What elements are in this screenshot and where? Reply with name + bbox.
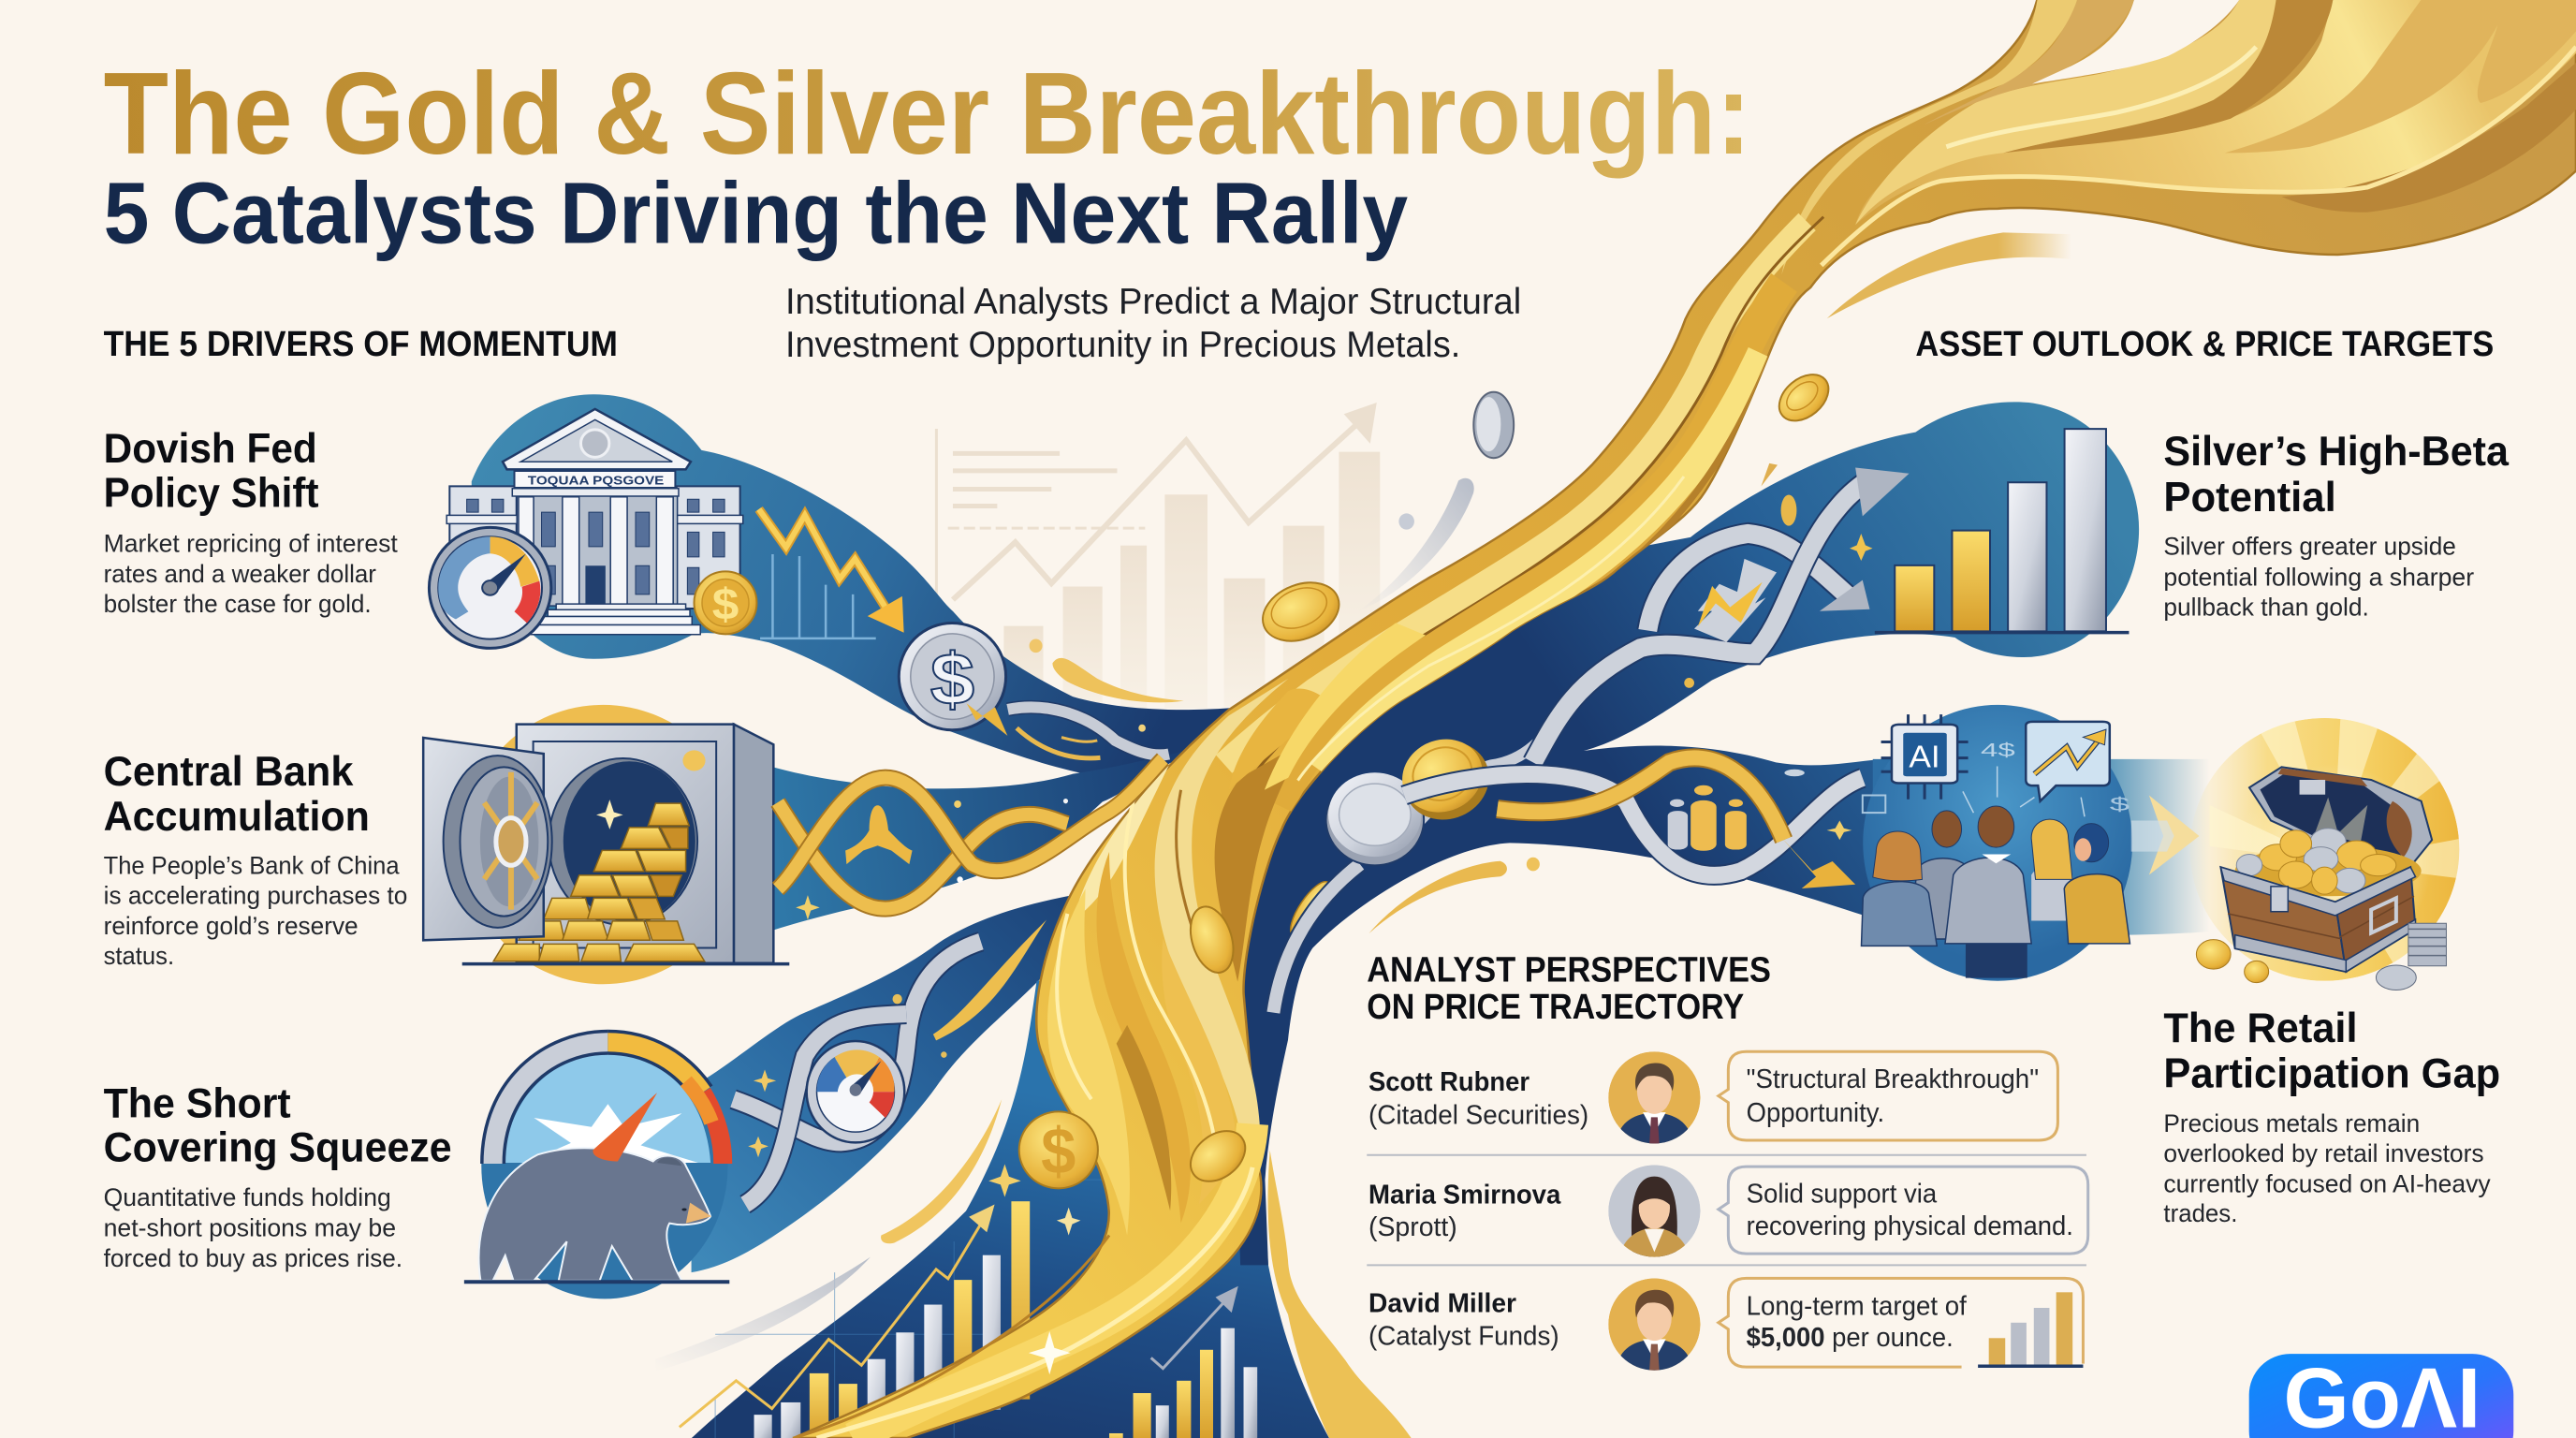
text block: Dovish Fed: bolster the case for gold.: [104, 589, 372, 618]
AI chip label: AI: [1909, 741, 1940, 775]
gold bars pile: [493, 803, 705, 961]
person 5: [2064, 824, 2130, 944]
open vault door: [423, 738, 552, 940]
icon: silver strands with small gauge: [733, 920, 1046, 1204]
icon: treasure chest: [2196, 767, 2446, 990]
text block: Central Bank: status.: [104, 941, 174, 970]
decorative swoosh: near lower chart: [655, 1099, 1002, 1372]
text block: Retail: The Retail: [2163, 1004, 2358, 1051]
avatar: Scott: [1608, 1051, 1701, 1147]
pediment: [503, 409, 691, 469]
ribbon silhouette: [794, 0, 2576, 1438]
chart: lower right bars: [1109, 1286, 1257, 1438]
arrow toward chest: [2131, 796, 2199, 874]
analyst row: Maria Smirnova: Maria Smirnova: [1368, 1181, 1561, 1211]
title: The Gold & Silver Breakthrough:: [104, 49, 1751, 179]
analyst heading: [1367, 950, 1771, 1026]
avatar: Maria: [1608, 1165, 1701, 1260]
text block: Central Bank: is accelerating purchases to: [104, 880, 407, 909]
falling arrow: [759, 509, 904, 633]
silver coin flying: [1473, 392, 1514, 458]
text block: Dovish Fed: [104, 424, 398, 618]
group of people: [1862, 806, 2130, 978]
person 3 centre: [1945, 806, 2031, 978]
floating symbols: [1863, 739, 2130, 816]
building sign: [515, 471, 675, 488]
coin with dollar: [1019, 1111, 1098, 1188]
chart speech bubble: [2026, 722, 2110, 801]
text block: Dovish Fed: Market repricing of interest: [104, 529, 398, 558]
text block: Central Bank: Central Bank: [104, 747, 354, 795]
building centre and columns: [512, 489, 679, 609]
icon: strands on stream 1: [1008, 707, 1169, 758]
bolt: [1694, 559, 1777, 642]
person 4: [2031, 819, 2076, 920]
text block: Silver: [2163, 427, 2510, 621]
silver dollar coin: [899, 623, 1006, 730]
decorative swoosh: analyst panel: [1368, 858, 1540, 933]
chest box: [2220, 867, 2416, 972]
bear: [479, 1148, 711, 1281]
gauge sky: [505, 1053, 710, 1163]
text block: Short Covering: forced to buy as prices rise.: [104, 1243, 402, 1272]
person 1: [1862, 831, 1937, 946]
text block: Central Bank: reinforce gold’s reserve: [104, 911, 359, 940]
analyst row: Scott Rubner: [1368, 1051, 2057, 1147]
analyst row: David Miller: [1368, 1278, 2083, 1373]
intro text: Investment Opportunity in Precious Metals.: [785, 325, 1460, 365]
AI chip: [1881, 714, 1969, 800]
icon: short squeeze gauge and bear: [464, 1033, 729, 1299]
subtitle: 5 Catalysts Driving the Next Rally: [104, 165, 1408, 262]
chart: lower rising bars: [680, 1165, 1109, 1438]
icon: gold helix on stream 2: [778, 759, 1163, 920]
icon: strands and people icon on retail stream: [1404, 757, 1863, 888]
ground: [464, 1280, 729, 1284]
people icon: [1668, 785, 1747, 851]
text block: Retail: trades.: [2163, 1198, 2237, 1227]
AI discussion circle: [1863, 705, 2132, 981]
person 2: [1912, 811, 1976, 939]
decorative swoosh: grey: [1357, 478, 1474, 611]
decorative swoosh: gold: [1030, 639, 1184, 702]
blue circle behind bear: [481, 1033, 728, 1299]
falling bars: [760, 554, 876, 638]
building wings: [446, 486, 743, 609]
text block: Silver: pullback than gold.: [2163, 592, 2369, 621]
decorative swoosh: above outlook heading: [1827, 232, 2071, 318]
icon: silver strands with arrows: [1533, 429, 2129, 762]
ribbon diagonal band shading: [1224, 217, 1823, 805]
analyst row: Scott Rubner: (Citadel Securities): [1368, 1100, 1588, 1130]
building sign: TOQUAA PQSGOVE: [528, 474, 665, 487]
ribbon top flows: [1781, 0, 2576, 274]
coin with dollar: $: [1041, 1115, 1076, 1188]
small gauge: [807, 1041, 904, 1142]
analyst row: Maria Smirnova: [1368, 1165, 2088, 1260]
dividers: [1367, 1155, 2086, 1265]
vault body: [517, 725, 773, 963]
gold coin large: [1393, 728, 1499, 831]
coin on strand: [1183, 901, 1241, 978]
text block: Retail: overlooked by retail investors: [2163, 1138, 2484, 1167]
text block: Retail: currently focused on AI-heavy: [2163, 1168, 2491, 1197]
chest glow: [2190, 707, 2465, 986]
text block: Silver: Silver’s High-Beta: [2163, 427, 2510, 475]
retail stream band toward chest: [1873, 759, 2210, 935]
text block: Silver: potential following a sharper: [2163, 562, 2474, 591]
quote bubble: Scott: [1719, 1051, 2057, 1140]
quote bubble: Maria: [1719, 1167, 2088, 1254]
intro text: Institutional Analysts Predict a Major Structural: [785, 282, 1521, 322]
panel: analyst perspectives: [1367, 950, 2088, 1373]
analyst row: David Miller: David Miller: [1368, 1288, 1516, 1318]
text block: Central Bank: [104, 747, 407, 970]
side coins: [2196, 923, 2446, 990]
stream 1: blue band for Fed policy: [472, 394, 1249, 778]
glow circle behind vault: [463, 705, 742, 984]
gauge arc: [493, 1042, 723, 1164]
analyst row: Scott Rubner: Scott Rubner: [1368, 1067, 1530, 1097]
silver bars chart: [1895, 429, 2106, 631]
analyst row: Maria Smirnova: (Sprott): [1368, 1212, 1457, 1242]
chest coin heap: [2235, 829, 2422, 896]
coin edge-on: [1284, 876, 1337, 942]
coin upper: [1255, 572, 1347, 652]
section heading: outlook: ASSET OUTLOOK & PRICE TARGETS: [1915, 324, 2494, 363]
mini bar chart: [1978, 1292, 2083, 1366]
icon: vault with gold bars: [423, 705, 789, 984]
ribbon twist strands: [793, 623, 1426, 1438]
right navy band: silver and retail streams: [1224, 402, 2139, 1265]
text block: Dovish Fed: rates and a weaker dollar: [104, 559, 376, 588]
text block: Central Bank: Accumulation: [104, 792, 370, 840]
text block: Retail: Participation Gap: [2163, 1049, 2500, 1096]
gold coins on ribbon: [1019, 572, 1591, 1192]
retail discussion details: [1863, 722, 2130, 816]
silver strand under coins: [1273, 679, 1591, 1013]
text block: Short Covering: [104, 1078, 452, 1272]
text block: Short Covering: Covering Squeeze: [104, 1123, 452, 1170]
floating symbols: $: [2110, 793, 2130, 815]
lower navy region with charts: [692, 969, 1329, 1438]
text block: Retail: [2163, 1004, 2500, 1227]
analyst heading: ON PRICE TRAJECTORY: [1367, 987, 1744, 1026]
stream 3: blue band for short squeeze: [692, 889, 1109, 1272]
analyst row: David Miller: (Catalyst Funds): [1368, 1322, 1559, 1352]
quote bubble: David: $5,000 per ounce.: [1747, 1323, 1954, 1353]
text block: Central Bank: The People’s Bank of China: [104, 851, 400, 880]
coin lower: [1181, 1121, 1254, 1192]
building steps: [531, 604, 700, 635]
intro text: [785, 282, 1521, 365]
gauge needle: [593, 1093, 657, 1162]
ghost background bar chart: [936, 403, 1380, 725]
text block: Short Covering: Quantitative funds holding: [104, 1182, 391, 1211]
gold dollar coin: $: [712, 580, 739, 629]
icon: Fed building and gauge: [429, 409, 1007, 736]
chest lid: [2249, 767, 2432, 871]
gold coin flying: [1761, 365, 1837, 486]
ribbon gap: [2032, 0, 2239, 84]
gold arc at lower right: [1268, 1151, 1412, 1438]
gauge: [429, 527, 551, 648]
ground line: [462, 962, 789, 965]
quote bubble: David: [1719, 1278, 2083, 1367]
quote bubble: David: Long-term target of: [1747, 1292, 1968, 1322]
avatar: David: [1608, 1278, 1701, 1373]
floating symbols: 4$: [1981, 739, 2015, 761]
text block: Short Covering: The Short: [104, 1078, 291, 1126]
silver coin: [1326, 772, 1424, 865]
text block: Retail: Precious metals remain: [2163, 1108, 2420, 1137]
quote bubble: Maria: recovering physical demand.: [1747, 1211, 2073, 1241]
text block: Dovish Fed: Policy Shift: [104, 468, 319, 516]
silver dollar coin: $: [930, 638, 974, 720]
quote bubble: Maria: Solid support via: [1747, 1180, 1938, 1210]
burst: [526, 1104, 698, 1163]
quote bubble: Scott: Opportunity.: [1747, 1098, 1884, 1128]
text block: Silver: Potential: [2163, 473, 2336, 521]
section heading: drivers: THE 5 DRIVERS OF MOMENTUM: [104, 324, 618, 363]
text block: Dovish Fed: Dovish Fed: [104, 424, 317, 472]
stream 2: blue band for central bank: [774, 748, 1199, 930]
gold dollar coin: [695, 571, 756, 634]
small gold arrow: [967, 703, 1007, 736]
text block: Silver: Silver offers greater upside: [2163, 532, 2456, 561]
gold ribbon: [793, 0, 2576, 1438]
quote bubble: Scott: "Structural Breakthrough": [1747, 1064, 2039, 1094]
text block: Short Covering: net-short positions may be: [104, 1212, 396, 1241]
analyst heading: ANALYST PERSPECTIVES: [1367, 950, 1771, 990]
